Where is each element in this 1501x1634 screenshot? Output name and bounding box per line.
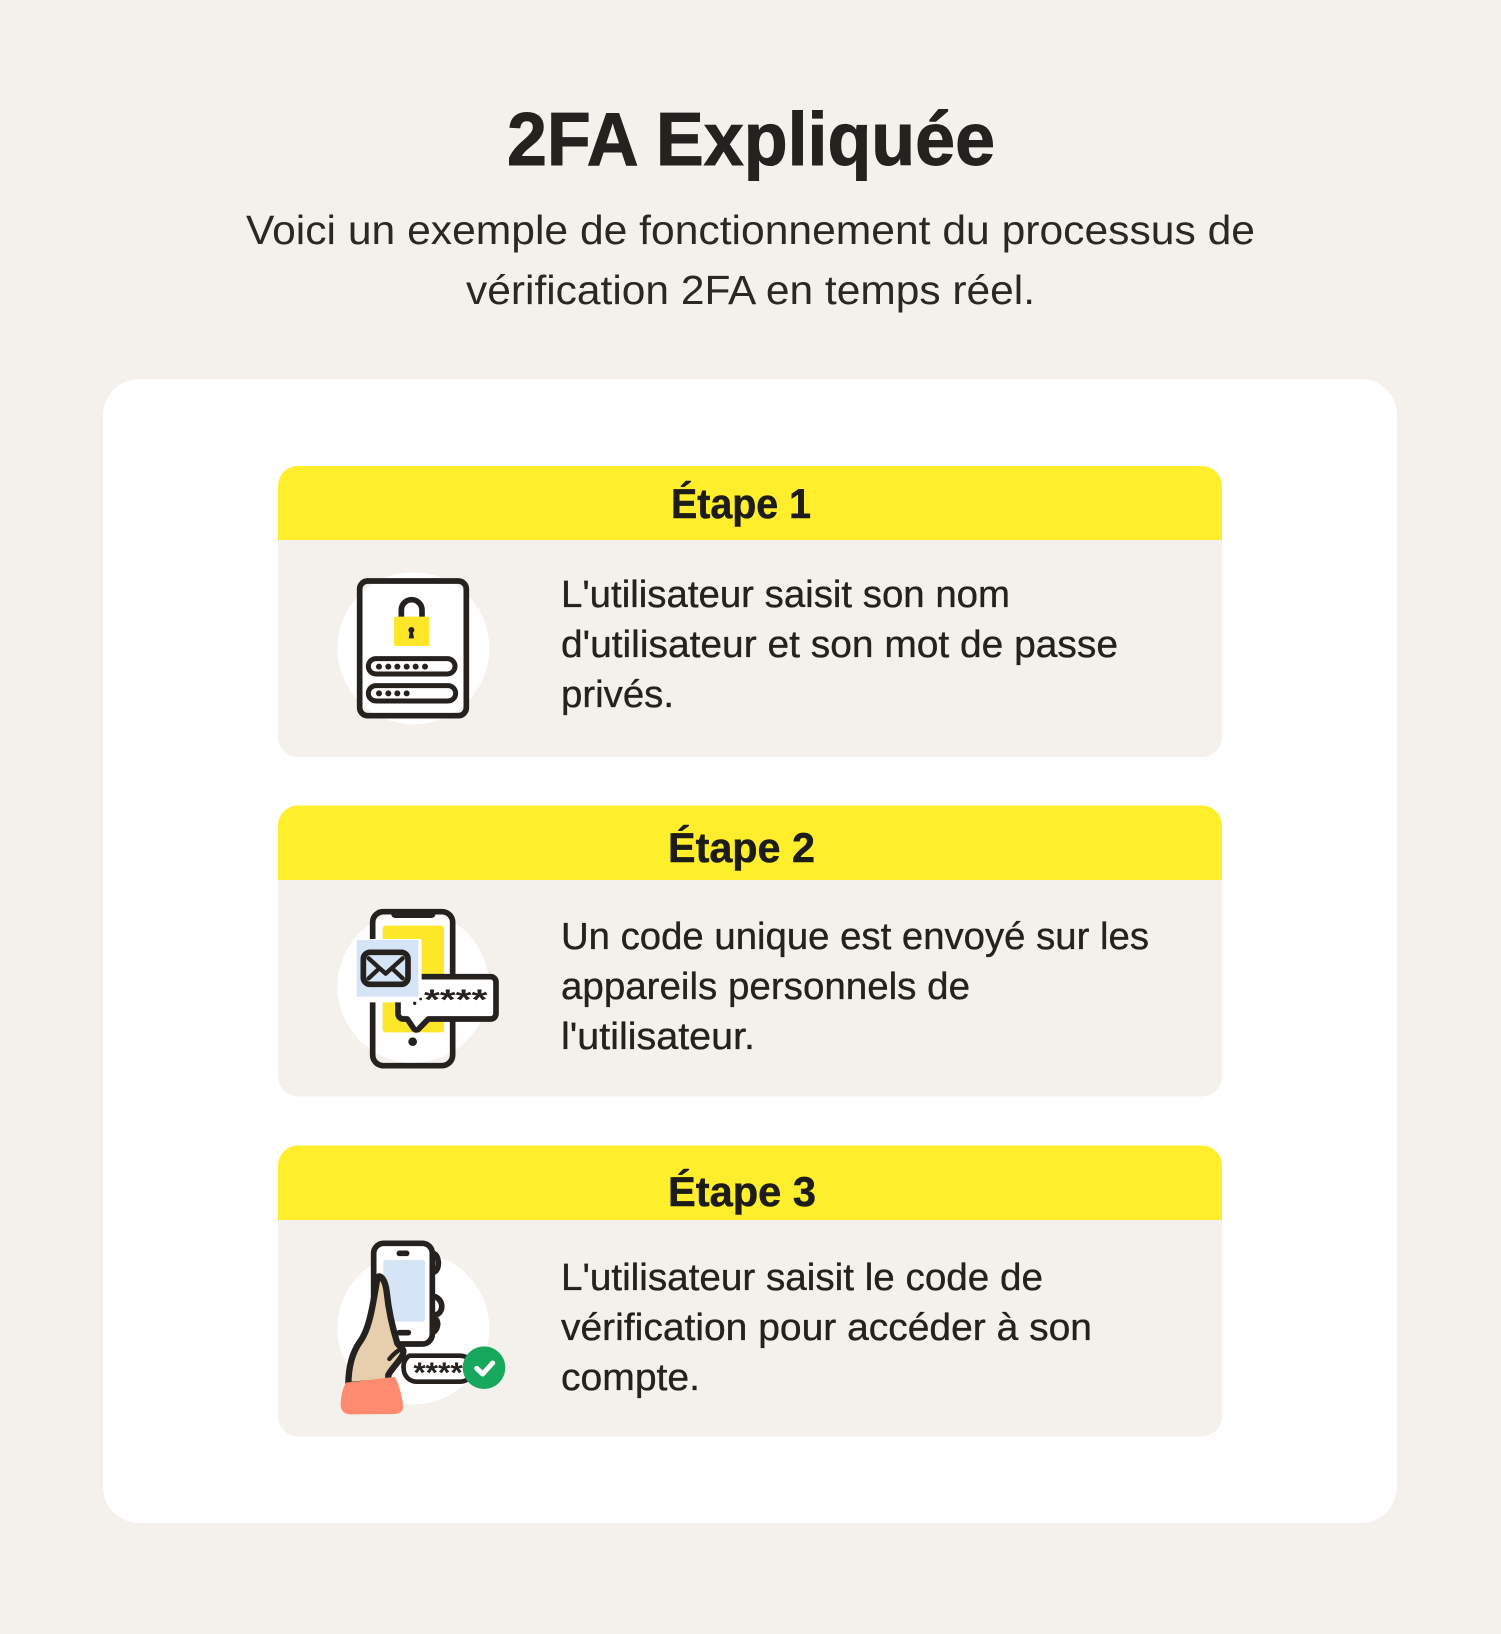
subtitle: Voici un exemple de fonctionnement du processus de: [246, 207, 1255, 253]
step 2 card: [278, 806, 1222, 1096]
step 1 card: [278, 466, 1222, 757]
icon: hand holding phone with verified code: ****: [413, 1357, 464, 1389]
step 1 text: [561, 574, 1118, 716]
step 1 heading: Étape 1: [671, 480, 811, 527]
step 3 heading: [278, 1146, 1222, 1220]
step 2 text: l'utilisateur.: [561, 1016, 755, 1058]
step 3 text: vérification pour accéder à son: [561, 1307, 1092, 1349]
step 3 text: L'utilisateur saisit le code de: [561, 1257, 1043, 1299]
step 1 text: d'utilisateur et son mot de passe: [561, 624, 1118, 666]
icon: phone with envelope and code message: ****: [424, 984, 489, 1016]
step 3 text: compte.: [561, 1357, 700, 1399]
title: 2FA Expliquée: [507, 97, 995, 181]
step 3 heading: Étape 3: [668, 1168, 816, 1215]
subtitle: [246, 207, 1255, 313]
icon: hand holding phone with verified code: [337, 1243, 505, 1414]
step 2 heading: [278, 806, 1222, 880]
step 1 text: L'utilisateur saisit son nom: [561, 574, 1010, 616]
step 2 text: Un code unique est envoyé sur les: [561, 916, 1149, 958]
icon: phone with envelope and code message: [337, 911, 496, 1066]
step 3 text: [561, 1257, 1092, 1399]
subtitle: vérification 2FA en temps réel.: [466, 267, 1035, 313]
step 2 text: [561, 916, 1149, 1058]
step 1 text: privés.: [561, 674, 674, 716]
panel: steps container: [103, 379, 1397, 1523]
step 3 card: [278, 1146, 1222, 1436]
step 2 heading: Étape 2: [668, 824, 815, 871]
step 1 heading: [278, 466, 1222, 540]
icon: login form with padlock: [337, 572, 489, 724]
step 2 text: appareils personnels de: [561, 966, 970, 1008]
